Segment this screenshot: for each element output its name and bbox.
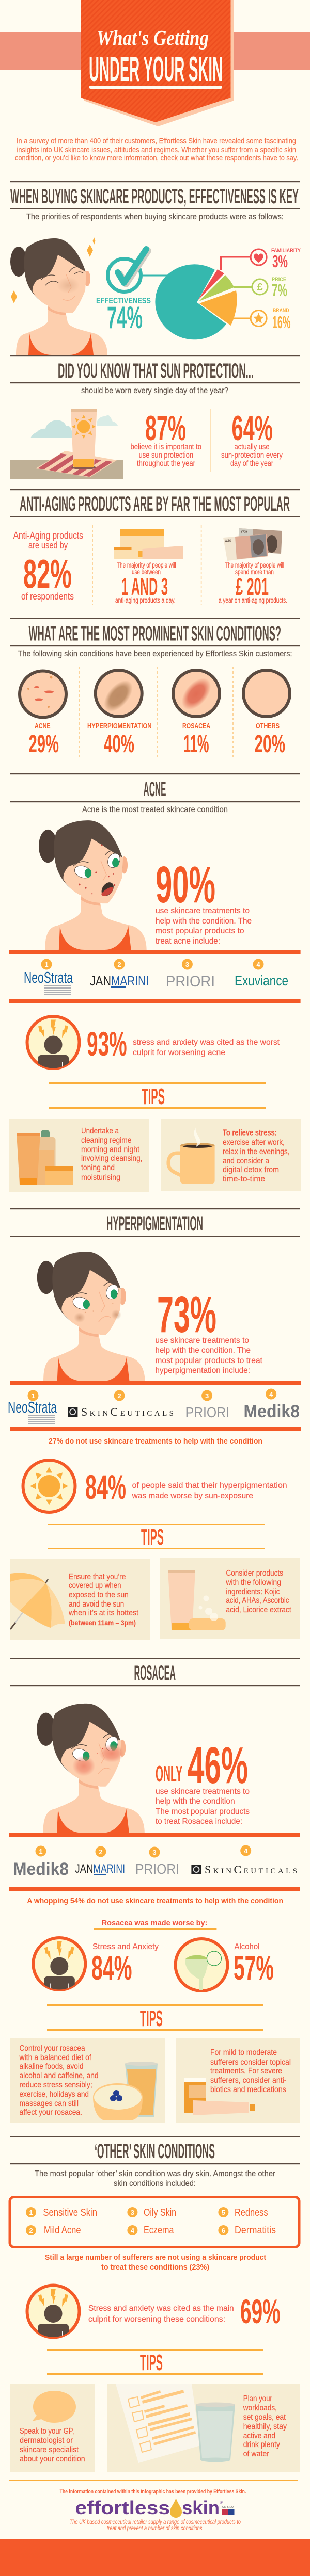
panel: rosacea products: JAN [75, 1862, 93, 1876]
panel: plan tip: of water [243, 2450, 269, 2458]
illustration: woman with rosacea [37, 1704, 145, 1833]
stat: 64%: sun-protection every [221, 451, 283, 460]
panel: hyperpigmentation products: Medik8 [244, 1402, 300, 1421]
stat: 82%: 82% [23, 551, 72, 596]
panel: acne products: Exuviance [235, 973, 288, 989]
panel: condition list: 1 [29, 2209, 33, 2216]
panel: rosacea products: MARINI [93, 1862, 125, 1876]
stat: 64%: 64% [231, 409, 273, 448]
panel: hyperpigmentation products: 2 [117, 1392, 121, 1400]
panel: cleansing tip [9, 1119, 149, 1192]
stat: 84% sun: was made worse by sun-exposure [132, 1492, 253, 1500]
panel: rosacea products: SkinCeuticals [205, 1863, 297, 1876]
stat: only 46% [156, 1737, 250, 1826]
panel: hyperpigmentation products [8, 1381, 301, 1431]
stat: 90%: 90% [156, 856, 215, 914]
stat: 82%: of respondents [21, 591, 74, 602]
panel: GP tip: dermatologist or [20, 2436, 73, 2445]
stat: only 46%: to treat Rosacea include: [156, 1817, 242, 1826]
tips heading: hyperpigmentation [48, 1524, 265, 1550]
panel: condition list [10, 2197, 299, 2247]
panel: stress tip: time-to-time [223, 1175, 265, 1184]
stat: products used: 1 AND 3 [121, 573, 168, 600]
stat: 93%: stress and anxiety was cited as the worst [133, 1038, 280, 1047]
panel: treatment tip: biotics and medications [210, 2085, 286, 2094]
callout: familiarity [221, 248, 301, 271]
panel: acne products: PRIORI [166, 973, 215, 990]
note: 23% [45, 2253, 266, 2272]
panel: condition list: Sensitive Skin [43, 2207, 97, 2218]
condition: hyperpigmentation: 40% [104, 731, 134, 758]
panel: hyperpigmentation products: 3 [205, 1392, 209, 1400]
heading: acne: ACNE [144, 778, 166, 801]
stat: 87%: believe it is important to [130, 443, 202, 451]
panel: acne products: MARINI [111, 973, 149, 989]
callout: brand: 16% [272, 313, 290, 332]
panel: rosacea products: 4 [244, 1847, 248, 1855]
stat: 93% [27, 1016, 280, 1073]
tips heading: other [47, 2349, 264, 2375]
condition: rosacea [173, 670, 220, 758]
stat: 84% sun: 84% [85, 1468, 126, 1506]
panel: acne products [9, 950, 301, 1003]
panel: stress tip: To relieve stress: [223, 1129, 277, 1138]
stat: 82%: are used by [28, 540, 68, 550]
panel: condition list: Mild Acne [44, 2225, 81, 2236]
subheading: other conditions: The most popular ‘other’ skin condition was dry skin. Amongst the other [35, 2169, 275, 2178]
callout: price: £ [257, 282, 263, 293]
panel: GP tip: skincare specialist [20, 2445, 79, 2454]
subheading: acne: Acne is the most treated skincare condition [82, 805, 228, 814]
panel: acne products: 4 [256, 961, 260, 968]
stat: only 46%: The most popular products [156, 1807, 250, 1816]
stat: 64%: actually use [235, 443, 270, 451]
subheading: other conditions [35, 2169, 275, 2188]
illustration: banknotes: £50 [240, 530, 247, 534]
stat: alcohol: Alcohol [235, 1942, 259, 1951]
label: effectiveness: 74% [107, 300, 143, 335]
dashed dividers: anti-aging [92, 525, 202, 605]
source note: The information contained within this Infographic has been provided by Effortless Skin. [60, 2489, 246, 2495]
panel: rosacea products: 3 [152, 1849, 157, 1856]
stat: spend [219, 561, 287, 604]
illustration: happy woman [10, 237, 107, 355]
stat: stress rosacea [33, 1938, 159, 1995]
panel: sun cover tip: and avoid the sun [69, 1600, 124, 1609]
stat: only 46%: ONLY [156, 1761, 182, 1787]
stat: alcohol: 57% [234, 1949, 274, 1987]
panel: plan tip: healthily, stay [243, 2422, 287, 2431]
stat: 64%: day of the year [230, 459, 274, 468]
panel: plan tip: drink plenty [243, 2440, 280, 2449]
illustration: banknotes [223, 528, 282, 561]
stat: 82%: Anti-Aging products [13, 530, 83, 541]
panel: GP tip: about your condition [20, 2455, 85, 2464]
stat: 84% sun [23, 1460, 287, 1512]
panel: sun cover tip: (between 11am – 3pm) [69, 1619, 136, 1627]
panel: condition list: Redness [235, 2207, 268, 2218]
stat: 87% [130, 409, 202, 468]
panel: ingredients tip: with the following [225, 1578, 281, 1587]
stat: only 46%: 46% [188, 1737, 248, 1794]
panel: plan tip: workloads, [243, 2404, 277, 2412]
stat: alcohol [176, 1939, 274, 1991]
tips heading: rosacea [47, 2004, 264, 2031]
panel: sun cover tip [5, 1559, 150, 1640]
panel: diet tip: exercise, holidays and [20, 2090, 89, 2099]
label: effectiveness [96, 297, 151, 335]
note: 23%: to treat these conditions (23%) [101, 2263, 209, 2272]
stat: 87%: throughout the year [137, 459, 196, 468]
panel: hyperpigmentation products: 1 [31, 1392, 35, 1400]
panel: ingredients tip: acid, Licorice extract [226, 1606, 291, 1614]
panel: treatment tip: sufferers, consider anti- [210, 2076, 286, 2085]
subheading: priorities: The priorities of respondents when buying skincare products were as follows: [26, 213, 284, 221]
logo: effortless skin: skin [182, 2497, 220, 2518]
stat: only 46%: help with the condition [156, 1797, 235, 1806]
logo: effortless skin: effortless [75, 2497, 170, 2518]
panel: diet tip: reduce stress sensibly; [20, 2081, 92, 2089]
callout: price [234, 277, 287, 300]
stat: 90% [156, 856, 252, 946]
stat: stress rosacea: Stress and Anxiety [92, 1942, 159, 1951]
panel: treatment tip: treatments. For severe [210, 2067, 282, 2076]
panel: cleansing tip: involving cleansing, [81, 1154, 143, 1163]
note: 23%: Still a large number of sufferers are not using a skincare product [45, 2253, 266, 2262]
panel: condition list: Eczema [144, 2225, 174, 2236]
panel: rosacea products: Medik8 [13, 1859, 69, 1879]
stat: 87%: 87% [145, 409, 186, 448]
panel: hyperpigmentation products: SkinCeuticals [81, 1405, 174, 1418]
stat: 73%: 73% [157, 1286, 216, 1343]
panel: plan tip: active and [243, 2432, 275, 2440]
condition: acne: ACNE [35, 722, 51, 731]
panel: sun cover tip: Ensure that you’re [69, 1573, 126, 1581]
panel: condition list: 3 [131, 2209, 134, 2216]
stat: products used: The majority of people will [117, 561, 176, 569]
panel: plan tip: set goals, eat [243, 2413, 286, 2422]
title script line: What's Getting [97, 26, 209, 50]
panel: diet tip: with a balanced diet of [19, 2053, 91, 2062]
logo: effortless skin: ® [220, 2500, 223, 2505]
subheading: sun protection: should be worn every single day of the year? [81, 386, 228, 395]
subheading: rosacea worse: Rosacea was made worse by: [102, 1919, 207, 1927]
illustration: sunscreen on towel [10, 409, 123, 479]
panel: stress tip: relax in the evenings, [223, 1147, 290, 1156]
panel: diet tip: massages can still [20, 2099, 79, 2108]
panel: rosacea products: 2 [99, 1848, 103, 1856]
stat: 73%: hyperpigmentation include: [155, 1366, 250, 1375]
stat: spend: spend more than [235, 568, 274, 576]
panel: rosacea products: PRIORI [135, 1861, 179, 1877]
stat: 90%: help with the condition. The [156, 917, 252, 926]
stat: 73% [155, 1286, 263, 1375]
callout: brand: BRAND [273, 307, 289, 314]
condition: others [243, 670, 290, 758]
stat: 90%: treat acne include: [156, 937, 220, 946]
panel: diet tip: alcohol and caffeine, and [20, 2071, 99, 2080]
dashed dividers: conditions [79, 667, 233, 758]
panel: rosacea products: 1 [39, 1848, 43, 1855]
panel: ingredients tip [160, 1558, 300, 1639]
heading: rosacea: ROSACEA [134, 1662, 176, 1684]
stat: 82% [13, 530, 83, 602]
panel: condition list: 4 [131, 2227, 135, 2234]
panel: treatment tip: sufferers consider topical [210, 2058, 291, 2067]
stat: only 46%: use skincare treatments to [156, 1787, 250, 1796]
condition: acne: 29% [29, 731, 59, 758]
condition: rosacea: ROSACEA [182, 722, 210, 731]
stat: products used: use between [132, 568, 161, 576]
panel: cleansing tip: Undertake a [81, 1127, 119, 1136]
stat: products used: anti-aging products a day. [115, 596, 176, 604]
panel: ingredients tip: acid, AHAs, Ascorbic [226, 1596, 289, 1605]
panel: ingredients tip: Consider products [226, 1569, 283, 1578]
pie chart [155, 264, 237, 339]
stat: 87%: use sun protection [139, 451, 193, 460]
panel: treatment tip: For mild to moderate [210, 2048, 277, 2057]
panel: plan tip [107, 2384, 300, 2472]
stat: 90%: most popular products to [156, 927, 244, 935]
stat: 84% sun: of people said that their hyperpigmentation [132, 1481, 287, 1490]
note: 54%: A whopping 54% do not use skincare treatments to help with the condition [27, 1897, 283, 1905]
retailer note [70, 2519, 241, 2532]
footer band [0, 2539, 310, 2576]
intro paragraph [15, 137, 298, 163]
panel: hyperpigmentation products: 4 [269, 1390, 273, 1398]
panel: cleansing tip: morning and night [81, 1145, 140, 1154]
stat: 73%: most popular products to treat [155, 1356, 263, 1365]
panel: acne products: 1 [44, 961, 49, 968]
title banner [0, 0, 310, 126]
condition: rosacea: 11% [183, 731, 209, 758]
logo: effortless skin: UK & EU [222, 2506, 234, 2509]
subheading: other conditions: skin conditions included: [114, 2179, 196, 2188]
tips heading: acne: TIPS [142, 1084, 165, 1109]
panel: sun cover tip: exposed to the sun [69, 1591, 129, 1599]
panel: cleansing tip: cleaning regime [81, 1136, 131, 1145]
stat: 69%: Stress and anxiety was cited as the main [88, 2304, 234, 2313]
stat: 90%: use skincare treatments to [156, 906, 250, 915]
subheading: conditions: The following skin conditions have been experienced by Effortless Skin customers: [18, 650, 292, 658]
panel: treatment tip [176, 2038, 300, 2123]
panel: condition list: 6 [222, 2227, 225, 2234]
panel: ingredients tip: ingredients: Kojic [226, 1587, 280, 1596]
panel: cleansing tip: moisturising [81, 1173, 120, 1182]
panel: sun cover tip: when it’s at its hottest [68, 1609, 139, 1617]
illustration: banknotes: £50 [225, 538, 231, 543]
stat: 69% [27, 2286, 281, 2342]
panel: rosacea products [9, 1833, 300, 1891]
panel: stress tip: and consider a [223, 1157, 269, 1165]
panel: diet tip: Control your rosacea [20, 2044, 85, 2053]
panel: sun cover tip: covered up when [69, 1581, 121, 1590]
panel: condition list: Dermatitis [235, 2225, 276, 2236]
icon: check ring [107, 249, 171, 292]
illustration: woman with hyperpigmentation [37, 1252, 145, 1381]
panel: stress tip [161, 1119, 301, 1191]
illustration: product boxes [114, 529, 183, 559]
condition: others: OTHERS [256, 722, 280, 731]
panel: plan tip: Plan your [243, 2394, 272, 2403]
callout: familiarity: 3% [272, 252, 288, 271]
retailer note: The UK based cosmeceutical retailer supply a range of cosmeceutical products to [70, 2519, 241, 2525]
note: 27%: 27% do not use skincare treatments to help with the condition [49, 1437, 262, 1446]
panel: condition list: Oily Skin [144, 2207, 176, 2218]
stat: 93%: culprit for worsening acne [133, 1048, 225, 1057]
tips heading: hyperpigmentation: TIPS [141, 1525, 164, 1550]
panel: acne products: 3 [185, 961, 189, 968]
stat: products used [115, 561, 176, 604]
panel: acne products: JAN [90, 973, 111, 989]
stat: spend: £ 201 [236, 573, 269, 600]
stat: 73%: help with the condition. The [155, 1346, 251, 1355]
callout: price: PRICE [272, 277, 286, 283]
panel: stress tip: digital detox from [223, 1165, 279, 1174]
panel: condition list: 5 [222, 2209, 225, 2216]
panel: stress tip: exercise after work, [223, 1138, 285, 1147]
panel: cleansing tip: toning and [81, 1163, 115, 1172]
panel: GP tip [10, 2384, 95, 2472]
stat: 73%: use skincare treatments to [155, 1336, 249, 1345]
panel: acne products: 2 [117, 961, 121, 968]
stat: spend: The majority of people will [225, 561, 284, 569]
condition: hyperpigmentation: HYPERPIGMENTATION [87, 722, 152, 731]
condition: hyperpigmentation [87, 670, 152, 758]
condition: others: 20% [254, 731, 285, 758]
panel: hyperpigmentation products: PRIORI [185, 1404, 229, 1420]
stat: 69%: 69% [240, 2292, 281, 2330]
panel: diet tip: alkaline foods, avoid [20, 2062, 84, 2071]
callout: brand [234, 307, 290, 332]
condition: acne [20, 671, 66, 758]
stat: 64% [221, 409, 283, 468]
retailer note: treat and prevent a number of skin conditions. [107, 2525, 204, 2532]
stat: stress rosacea: 84% [91, 1949, 132, 1987]
label: effectiveness: EFFECTIVENESS [96, 297, 151, 305]
tips heading: other: TIPS [140, 2350, 163, 2375]
callout: familiarity: FAMILIARITY [271, 248, 301, 254]
panel: GP tip: Speak to your GP, [20, 2427, 74, 2436]
stat: spend: a year on anti-aging products. [219, 596, 287, 604]
logo: effortless skin [75, 2497, 235, 2518]
callout: price: 7% [272, 281, 287, 300]
stat: 69%: culprit for worsening these conditions: [88, 2315, 225, 2324]
panel: diet tip: affect your rosacea. [20, 2108, 82, 2117]
tips heading: rosacea: TIPS [140, 2006, 163, 2031]
panel: condition list: 2 [29, 2227, 33, 2234]
stat: 93%: 93% [87, 1025, 127, 1063]
tips heading: acne [49, 1082, 266, 1109]
panel: diet tip [10, 2038, 165, 2123]
illustration: woman with acne [39, 820, 147, 950]
